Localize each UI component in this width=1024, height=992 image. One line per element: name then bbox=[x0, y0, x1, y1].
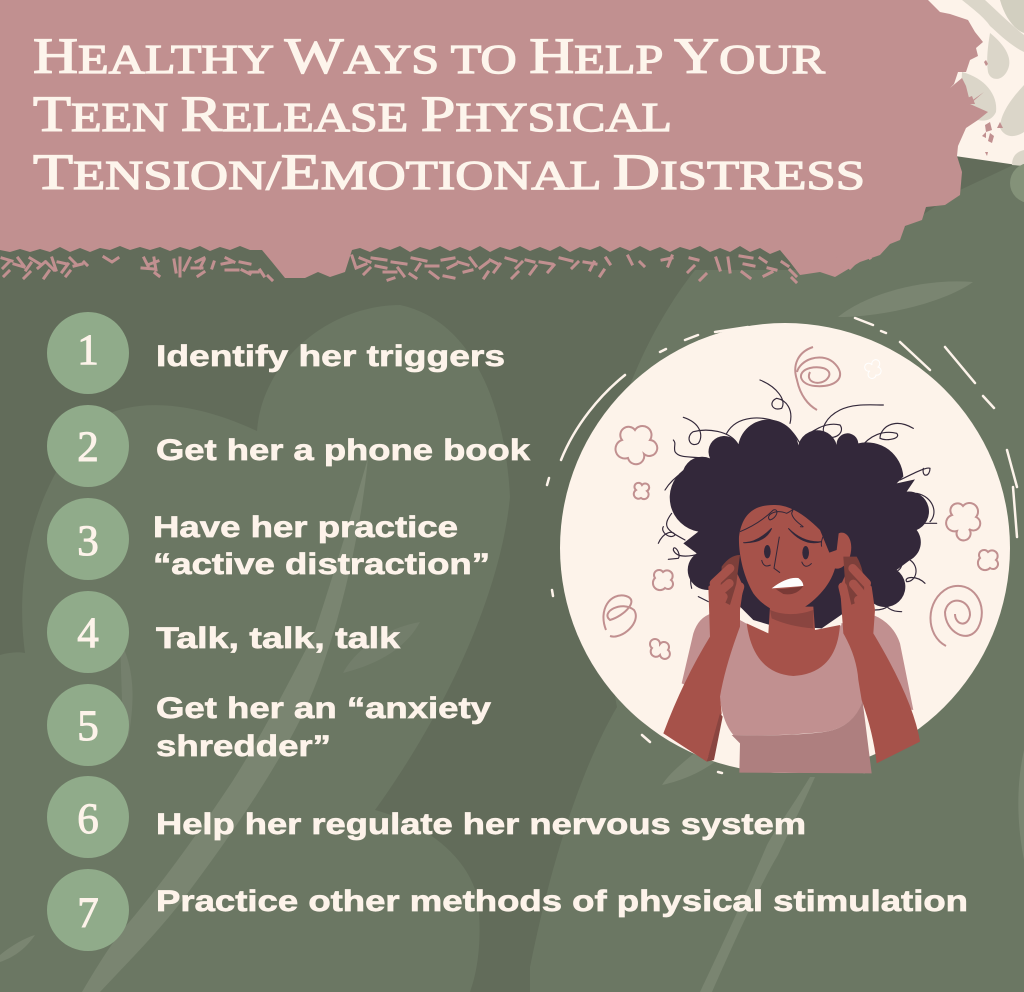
badge 4: 4 bbox=[77, 610, 99, 657]
illustration: stressed teen in circle bbox=[547, 318, 1017, 773]
list items bbox=[153, 340, 968, 918]
cream gaps bbox=[740, 620, 842, 633]
item 3: Have her practice bbox=[153, 511, 458, 544]
badge 3 bbox=[47, 498, 129, 580]
header brush streaks bbox=[2, 257, 272, 280]
circle backdrop bbox=[547, 318, 1017, 773]
item 5 bbox=[156, 692, 491, 763]
badge 6: 6 bbox=[77, 796, 99, 843]
item 5: Get her an “anxiety bbox=[156, 692, 491, 725]
badge 1: 1 bbox=[77, 327, 99, 374]
arm shadow bbox=[707, 713, 723, 762]
title: HEALTHY W AYS TO HELP YOUR bbox=[33, 29, 826, 85]
flyaway curls bbox=[658, 380, 937, 612]
badge 1 bbox=[47, 312, 129, 394]
top-right corner decoration bbox=[925, 0, 1024, 203]
badge 7 bbox=[47, 869, 129, 951]
title bbox=[33, 29, 865, 201]
item 1: Identify her triggers bbox=[156, 340, 505, 373]
badge 6 bbox=[47, 776, 129, 858]
item 7: Practice other methods of physical stimulation bbox=[156, 885, 968, 918]
facial features bbox=[740, 508, 827, 594]
character, drawn in a 3x grid bbox=[658, 380, 937, 773]
item 4: Talk, talk, talk bbox=[156, 622, 400, 655]
shirt bbox=[682, 613, 913, 735]
neck and chest bbox=[747, 607, 840, 676]
neck shadow bbox=[770, 610, 813, 628]
shirt hem shading bbox=[732, 702, 872, 773]
badge 2: 2 bbox=[77, 424, 99, 471]
title: TEEN RELEASE PHYSICAL bbox=[33, 87, 672, 143]
arms bbox=[663, 565, 920, 763]
header brush panel bbox=[0, 0, 1003, 282]
doodles bbox=[603, 347, 998, 659]
face bbox=[739, 505, 851, 613]
badge 5 bbox=[47, 684, 129, 766]
badge 2 bbox=[47, 405, 129, 487]
item 6: Help her regulate her nervous system bbox=[156, 808, 806, 841]
badge 4 bbox=[47, 591, 129, 673]
badge 7: 7 bbox=[77, 890, 99, 937]
item 3 bbox=[153, 511, 490, 581]
hair bbox=[670, 420, 929, 628]
badge 3: 3 bbox=[77, 518, 99, 565]
item 3: “active distraction” bbox=[153, 548, 490, 581]
title: TENSION/ EMOTIONAL D ISTRESS bbox=[33, 145, 865, 201]
item 5: shredder” bbox=[156, 730, 331, 763]
item 2: Get her a phone book bbox=[156, 434, 530, 467]
number badges bbox=[47, 312, 129, 951]
badge 5: 5 bbox=[77, 703, 99, 750]
hands bbox=[714, 555, 867, 617]
